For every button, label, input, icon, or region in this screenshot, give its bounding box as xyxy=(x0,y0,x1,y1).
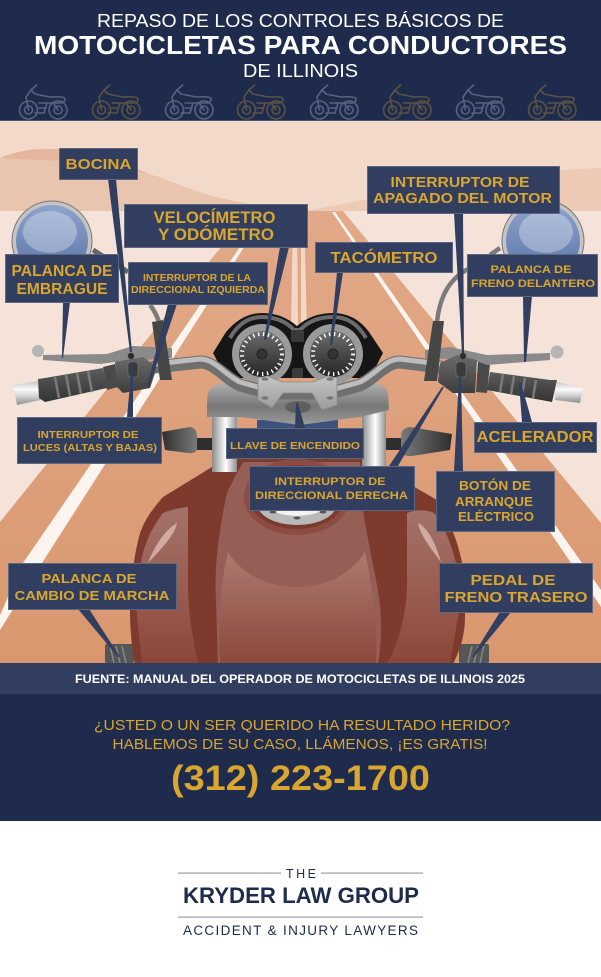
right controls xyxy=(424,321,583,403)
motorcycle icon row xyxy=(20,85,576,119)
logo: the kryder law group: KRYDER LAW GROUP xyxy=(183,883,419,908)
left controls xyxy=(13,320,172,405)
title xyxy=(34,11,567,81)
call to action panel: HABLEMOS DE SU CASO, LLÁMENOS, ¡ES GRATIS! xyxy=(112,736,488,753)
label: llave de encendido xyxy=(226,403,364,458)
turn signals xyxy=(162,427,452,456)
title: DE ILLINOIS xyxy=(243,61,358,81)
source bar xyxy=(0,663,601,694)
call to action panel: (312) 223-1700 xyxy=(171,759,430,798)
label: velocímetro y odómetro: VELOCÍMETRO xyxy=(154,208,276,227)
label: pedal de freno trasero: PEDAL DE xyxy=(470,573,556,589)
label: interruptor de la direccional izquierda: INTERRUPTOR DE LA xyxy=(143,273,251,284)
label: pedal de freno trasero xyxy=(440,564,592,657)
logo: the kryder law group: ACCIDENT & INJURY LAWYERS xyxy=(183,923,418,938)
title: MOTOCICLETAS PARA CONDUCTORES xyxy=(34,32,567,60)
label: interruptor de apagado del motor: APAGADO DEL MOTOR xyxy=(373,191,553,207)
road scene background xyxy=(0,120,601,664)
source bar: FUENTE: MANUAL DEL OPERADOR DE MOTOCICLETAS DE ILLINOIS 2025 xyxy=(75,672,525,686)
title: REPASO DE LOS CONTROLES BÁSICOS DE xyxy=(97,11,504,31)
label: velocímetro y odómetro: Y ODÓMETRO xyxy=(158,225,274,244)
label: interruptor de direccional derecha: DIRECCIONAL DERECHA xyxy=(255,490,408,502)
label: palanca de freno delantero xyxy=(468,254,598,362)
handlebar clamp xyxy=(258,376,337,410)
label: palanca de embrague xyxy=(6,254,118,358)
handlebar xyxy=(155,359,440,393)
label: interruptor de la direccional izquierda xyxy=(128,262,268,387)
label: interruptor de la direccional izquierda: DIRECCIONAL IZQUIERDA xyxy=(131,285,265,296)
logo: the kryder law group: THE xyxy=(286,867,316,881)
motorcycle fuel tank xyxy=(130,420,465,664)
label: interruptor de apagado del motor xyxy=(368,166,560,353)
label: llave de encendido: LLAVE DE ENCENDIDO xyxy=(230,440,360,452)
label: tacómetro xyxy=(316,242,452,345)
label: tacómetro: TACÓMETRO xyxy=(330,248,438,267)
label: palanca de cambio de marcha: PALANCA DE xyxy=(42,571,137,586)
label: interruptor de luces xyxy=(18,363,162,464)
label: interruptor de direccional derecha: INTERRUPTOR DE xyxy=(274,476,386,488)
label: palanca de freno delantero: FRENO DELANTERO xyxy=(471,278,596,290)
mirrors xyxy=(12,200,584,325)
logo: the kryder law group xyxy=(178,867,423,938)
label: pedal de freno trasero: FRENO TRASERO xyxy=(444,590,588,606)
label: botón de arranque eléctrico: BOTÓN DE xyxy=(459,478,531,493)
fork and triple clamp xyxy=(207,383,389,472)
label: velocímetro y odómetro xyxy=(124,204,308,340)
label: acelerador: ACELERADOR xyxy=(476,429,594,446)
label: acelerador xyxy=(474,383,596,452)
header background xyxy=(0,0,601,120)
footer background xyxy=(0,821,601,977)
label: interruptor de apagado del motor: INTERRUPTOR DE xyxy=(390,175,530,191)
label: palanca de cambio de marcha: CAMBIO DE MARCHA xyxy=(14,588,170,603)
foot controls xyxy=(105,644,489,663)
call to action panel: ¿USTED O UN SER QUERIDO HA RESULTADO HERIDO? xyxy=(94,717,510,734)
label: palanca de embrague: PALANCA DE xyxy=(12,263,112,280)
label: interruptor de luces: LUCES (ALTAS Y BAJAS) xyxy=(23,442,157,454)
label: botón de arranque eléctrico: ELÉCTRICO xyxy=(458,509,534,524)
label: palanca de embrague: EMBRAGUE xyxy=(16,281,108,298)
label: interruptor de direccional derecha xyxy=(250,387,444,510)
label: palanca de freno delantero: PALANCA DE xyxy=(490,264,572,276)
label: palanca de cambio de marcha xyxy=(8,564,176,657)
label: bocina: BOCINA xyxy=(66,156,132,173)
label: botón de arranque eléctrico: ARRANQUE xyxy=(455,495,533,509)
label: bocina xyxy=(60,148,138,352)
call to action panel xyxy=(0,694,601,821)
label: interruptor de luces: INTERRUPTOR DE xyxy=(38,429,138,441)
label: botón de arranque eléctrico xyxy=(436,377,554,532)
instrument cluster xyxy=(213,313,383,384)
